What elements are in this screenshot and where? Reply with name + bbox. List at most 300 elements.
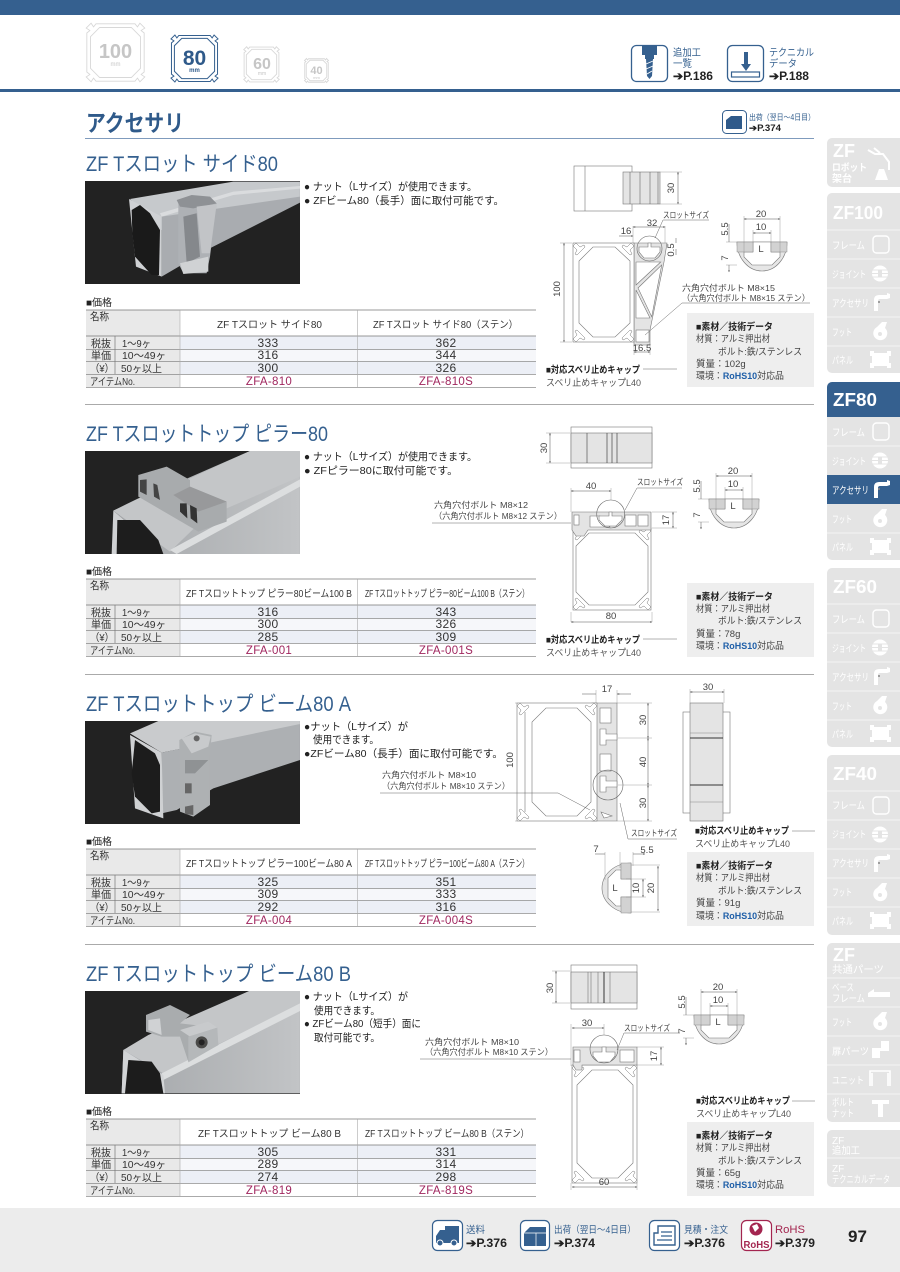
frame section: 17 (602, 684, 612, 695)
frame section: 17 (649, 1051, 660, 1061)
features: 使用できます。 (314, 1004, 380, 1017)
material data box: ボルト:鉄/ステンレス (718, 885, 802, 897)
sidebar: ZF machining and technical data (827, 1130, 900, 1187)
slot size section: L (758, 244, 764, 255)
product photo (85, 721, 300, 824)
sidebar: ZF100: ZF100 (833, 203, 883, 223)
frame section: 六角穴付ボルト M8×10 (425, 1037, 519, 1047)
material data box: 材質：アルミ押出材 (696, 1142, 770, 1154)
price table: 325 (258, 875, 278, 889)
icon: 40mm: 40 (310, 65, 323, 77)
frame section: 30 (638, 798, 649, 808)
price table: ZF Tスロットトップ ビーム80 B (198, 1128, 341, 1140)
slot size section: 10 (756, 222, 766, 233)
price table: 274 (258, 1170, 278, 1184)
frame section: 六角穴付ボルト M8×12 (434, 500, 528, 510)
price table: 326 (436, 361, 456, 375)
material data box: ボルト:鉄/ステンレス (718, 615, 802, 627)
sidebar: ZF100: ジョイント (832, 270, 866, 281)
sidebar: ZF60 (827, 568, 900, 747)
price table: ■価格 (86, 1105, 112, 1118)
frame section: スロットサイズ (637, 477, 683, 487)
price table: ZF Tスロット サイド80（ステン） (373, 319, 518, 331)
slot size section: 5.5 (677, 995, 688, 1009)
footer: RoHS: RoHS (744, 1240, 770, 1251)
price table: 1〜9ヶ (122, 877, 151, 889)
nav: additional machining: ➔P.186 (673, 71, 713, 83)
sidebar: ZF robot: ZF (833, 141, 855, 161)
features: ●ZFビーム80（長手）面に取付可能です。 (304, 747, 503, 760)
sidebar: ZF60: パネル (832, 729, 853, 741)
top view: 30 (545, 983, 556, 993)
price table: アイテムNo. (90, 1185, 135, 1197)
technical drawing (380, 682, 730, 913)
nav: additional machining: 一覧 (673, 57, 692, 70)
price table: ZFA-810 (246, 376, 292, 388)
price table: （¥） (90, 902, 114, 914)
sidebar: ZF60: フレーム (832, 614, 865, 626)
footer: shipping date (520, 1220, 636, 1250)
footer: RoHS (742, 1220, 815, 1251)
price table: ZF Tスロットトップ ピラー80ビーム100 B (186, 588, 352, 600)
footer: RoHS: RoHS (775, 1224, 805, 1236)
frame section (432, 477, 683, 622)
frame and bracket section: 16.5 (633, 343, 651, 354)
price table: 単価 (91, 1158, 111, 1171)
material data box: 材質：アルミ押出材 (696, 333, 770, 345)
sidebar: ZF100: フレーム (832, 240, 865, 252)
icon: 60mm: 60 (253, 56, 271, 73)
material data box: 材質：アルミ押出材 (696, 872, 770, 884)
price table: 289 (258, 1157, 278, 1171)
price table: （¥） (90, 363, 114, 375)
frame and bracket section: 32 (647, 218, 657, 229)
header rule (0, 89, 900, 92)
features: ●ナット（Lサイズ）が (304, 720, 408, 733)
top view: 30 (666, 183, 677, 193)
price table: 10〜49ヶ (122, 889, 166, 901)
price table: ZF Tスロット サイド80 (217, 319, 322, 331)
material data box: 質量：102g (696, 358, 746, 370)
price table: 309 (258, 887, 278, 901)
frame section: 30 (582, 1018, 592, 1029)
price table: 10〜49ヶ (122, 619, 166, 631)
price table: ZFA-819S (419, 1185, 473, 1197)
heading: ZF Tスロット サイド80 (86, 153, 278, 176)
icon: 60mm: mm (258, 71, 266, 77)
sidebar: ZF60: ZF60 (833, 577, 877, 597)
sidebar: ZF robot: ロボット (832, 162, 867, 174)
features: ● ZFピラー80に取付可能です。 (304, 464, 458, 477)
price table: 50ヶ以上 (121, 632, 162, 644)
features: ● ZFビーム80（長手）面に取付可能です。 (304, 194, 504, 207)
price table: アイテムNo. (90, 645, 135, 657)
material data box (687, 583, 814, 657)
price table: 326 (436, 617, 456, 631)
technical drawing (432, 427, 759, 622)
sidebar: ZF machining and technical data: ZF (832, 1136, 844, 1147)
footer: quotation and order: 見積・注文 (684, 1224, 728, 1236)
material data box: ■素材／技術データ (696, 860, 773, 872)
sidebar: ZF common parts: 共通パーツ (832, 964, 884, 976)
sidebar: ZF machining and technical data: ZF (832, 1164, 844, 1175)
slot size section: 20 (713, 982, 723, 993)
features: ● ナット（Lサイズ）が (304, 990, 408, 1003)
price table: 333 (258, 336, 278, 350)
slot size section (692, 466, 759, 529)
icon: 40mm (304, 58, 328, 82)
material data box: 環境：RoHS10対応品 (696, 370, 784, 382)
footer: shipping cost: 送料 (466, 1224, 485, 1236)
price table: 300 (258, 617, 278, 631)
nav: technical data: データ (769, 57, 797, 70)
slot size section (593, 844, 660, 913)
footer: quotation and order (650, 1220, 728, 1250)
price table (86, 1105, 536, 1197)
top colour band (0, 0, 900, 15)
slot size section: 5.5 (640, 845, 654, 856)
nav: additional machining: 追加工 (673, 46, 701, 59)
sidebar: ZF60: ジョイント (832, 644, 866, 655)
price table: ■価格 (86, 296, 112, 309)
slot size section: 7 (593, 844, 599, 855)
anti-slip cap: スベリ止めキャップL40 (546, 377, 641, 389)
price table: ZF Tスロットトップ ピラー80ビーム100 B（ステン） (365, 588, 529, 600)
section divider (85, 404, 814, 405)
material data box (687, 1122, 814, 1196)
sidebar: ZF60: アクセサリ (832, 672, 869, 684)
price table: アイテムNo. (90, 915, 135, 927)
anti-slip cap (695, 825, 815, 850)
sidebar: ZF60: フット (832, 702, 852, 713)
sidebar: ZF common parts: 扉パーツ (832, 1046, 869, 1058)
price table: 351 (436, 875, 456, 889)
price table: ZFA-001 (246, 645, 292, 657)
heading: ZF Tスロットトップ ビーム80 A (86, 693, 351, 716)
icon: 100mm (86, 23, 145, 82)
footer: shipping date: ➔P.374 (554, 1238, 596, 1250)
nav: additional machining (632, 46, 713, 83)
sidebar: ZF40 (827, 755, 900, 935)
page number: 97 (848, 1227, 867, 1246)
features: ● ナット（Lサイズ）が使用できます。 (304, 180, 477, 193)
anti-slip cap: ■対応スベリ止めキャップ (695, 825, 789, 837)
sidebar: ZF100: アクセサリ (832, 298, 869, 310)
section 3: ZF T-slot top beam 80 A (85, 682, 815, 927)
sidebar: ZF robot: 架台 (832, 172, 852, 185)
sidebar: ZF40: ジョイント (832, 830, 866, 841)
slot size section: L (730, 501, 736, 512)
anti-slip cap: スベリ止めキャップL40 (546, 647, 641, 659)
nav: technical data (728, 46, 814, 83)
sidebar: ZF common parts: ボルト (832, 1097, 854, 1109)
frame and bracket section (552, 210, 810, 355)
sidebar: ZF100: パネル (832, 355, 853, 367)
price table: 50ヶ以上 (121, 902, 162, 914)
section 1: ZF T-slot side 80 (85, 153, 814, 389)
frame section: スロットサイズ (624, 1023, 670, 1033)
title rule (85, 138, 814, 139)
sidebar: ZF common parts: ZF (833, 945, 855, 965)
price table: 税抜 (91, 606, 111, 619)
technical drawing (420, 965, 744, 1190)
frame section: （六角穴付ボルト M8×10 ステン） (382, 781, 510, 791)
frame section: 60 (599, 1177, 609, 1188)
price table: アイテムNo. (90, 376, 135, 388)
slot size section: 20 (728, 466, 738, 477)
price table: 292 (258, 900, 278, 914)
footer band (0, 1208, 900, 1272)
slot size section: 10 (631, 883, 642, 893)
icon: 80mm selected: 80 (183, 47, 206, 70)
price table: 税抜 (91, 1146, 111, 1159)
price table: 単価 (91, 618, 111, 631)
frame and bracket section: 16 (621, 226, 631, 237)
material data box: 環境：RoHS10対応品 (696, 640, 784, 652)
slot size section (677, 982, 744, 1045)
nav: shipping: 出荷（翌日〜4日目） (749, 112, 815, 122)
sidebar: ZF80 active (827, 382, 900, 560)
slot size section: L (715, 1017, 721, 1028)
section 2: ZF T-slot top pillar 80 (85, 423, 814, 659)
frame and bracket section: 100 (552, 281, 563, 297)
heading: ZF Tスロットトップ ピラー80 (86, 423, 328, 446)
slot size section: 10 (713, 995, 723, 1006)
price table: 300 (258, 361, 278, 375)
sidebar: ZF common parts: フレーム (832, 993, 865, 1005)
anti-slip cap (546, 634, 677, 659)
price table: ■価格 (86, 835, 112, 848)
price table: ZF Tスロットトップ ピラー100ビーム80 A（ステン） (365, 858, 529, 870)
sidebar: ZF80 active: ZF80 (833, 390, 877, 410)
product photo (85, 181, 300, 284)
sidebar: ZF40: ZF40 (833, 764, 877, 784)
frame section: 17 (661, 515, 672, 525)
icon: 40mm: mm (313, 75, 320, 80)
sidebar: ZF100: フット (832, 328, 852, 339)
price table: ZF Tスロットトップ ビーム80 B（ステン） (365, 1128, 529, 1140)
sidebar: ZF40: パネル (832, 916, 853, 928)
price table: ZFA-001S (419, 645, 473, 657)
price table: 309 (436, 630, 456, 644)
frame section: 40 (586, 481, 596, 492)
features: 使用できます。 (313, 733, 379, 746)
price table: 331 (436, 1145, 456, 1159)
sidebar: ZF80 active: フレーム (832, 427, 865, 439)
frame section (420, 1018, 680, 1190)
features: 取付可能です。 (314, 1031, 380, 1044)
price table: 314 (436, 1157, 456, 1171)
slot size section: 5.5 (720, 222, 731, 236)
price table: 305 (258, 1145, 278, 1159)
slot size section: 20 (756, 209, 766, 220)
sidebar: ZF80 active: パネル (832, 542, 853, 554)
nav: shipping (722, 110, 815, 134)
frame and bracket section: スロットサイズ (663, 210, 709, 220)
top view (574, 166, 682, 211)
price table: 362 (436, 336, 456, 350)
price table: 333 (436, 887, 456, 901)
price table: 税抜 (91, 337, 111, 350)
slot size section: 10 (728, 479, 738, 490)
sidebar: ZF80 active: アクセサリ (832, 485, 869, 497)
slot size section: L (612, 883, 618, 894)
price table: ZFA-819 (246, 1185, 292, 1197)
product photo (85, 451, 300, 554)
sidebar: ZF common parts (827, 943, 900, 1122)
material data box: 環境：RoHS10対応品 (696, 1179, 784, 1191)
price table (86, 835, 536, 927)
features (304, 720, 503, 760)
price table: 1〜9ヶ (122, 607, 151, 619)
size selector icons (86, 23, 328, 82)
icon: 100mm: mm (110, 62, 120, 68)
footer: quotation and order: ➔P.376 (684, 1238, 725, 1250)
footer: shipping cost: ➔P.376 (466, 1238, 507, 1250)
price table: 1〜9ヶ (122, 1147, 151, 1159)
price table: 316 (258, 605, 278, 619)
material data box: ■素材／技術データ (696, 1130, 773, 1142)
price table: ZF Tスロットトップ ピラー100ビーム80 A (186, 858, 352, 870)
footer: shipping date: 出荷（翌日〜4日目） (554, 1224, 636, 1236)
frame section: 六角穴付ボルト M8×10 (382, 770, 476, 780)
top view: 30 (539, 443, 550, 453)
top view (539, 427, 652, 468)
icon: 80mm selected (171, 35, 218, 82)
price table: 344 (436, 348, 456, 362)
sidebar: ZF common parts: ユニット (832, 1076, 864, 1087)
sidebar: ZF40: アクセサリ (832, 858, 869, 870)
features (304, 450, 477, 477)
icon: 80mm selected: mm (189, 68, 200, 74)
anti-slip cap (546, 364, 677, 389)
side view: 30 (703, 682, 713, 693)
price table (86, 296, 536, 388)
slot size section: 7 (692, 512, 703, 518)
frame section: （六角穴付ボルト M8×12 ステン） (434, 511, 562, 521)
frame section: 40 (638, 757, 649, 767)
frame section: （六角穴付ボルト M8×10 ステン） (425, 1047, 553, 1057)
price table: 316 (258, 348, 278, 362)
material data box: ボルト:鉄/ステンレス (718, 346, 802, 358)
price table: 名称 (90, 849, 109, 862)
price table: 名称 (90, 1119, 109, 1132)
side view (683, 682, 730, 821)
slot size section: 7 (677, 1028, 688, 1034)
icon: 60mm (244, 47, 279, 82)
price table: ZFA-004S (419, 915, 473, 927)
footer: shipping cost (432, 1220, 507, 1250)
sidebar: ZF common parts: フット (832, 1018, 852, 1029)
material data box: ボルト:鉄/ステンレス (718, 1155, 802, 1167)
slot size section (720, 209, 787, 272)
sidebar: ZF robot (827, 138, 900, 187)
frame and bracket section: （六角穴付ボルト M8×15 ステン） (682, 293, 810, 303)
price table: 285 (258, 630, 278, 644)
sidebar: ZF machining and technical data: 追加工 (832, 1144, 860, 1157)
frame section: 30 (638, 715, 649, 725)
slot size section: 7 (720, 255, 731, 261)
price table: ZFA-004 (246, 915, 292, 927)
price table: （¥） (90, 1172, 114, 1184)
frame section: 100 (505, 752, 516, 768)
price table: 50ヶ以上 (121, 363, 162, 375)
price table: 単価 (91, 888, 111, 901)
features (304, 990, 421, 1044)
price table: 名称 (90, 579, 109, 592)
technical drawing (552, 166, 810, 355)
price table: 10〜49ヶ (122, 1159, 166, 1171)
price table: 10〜49ヶ (122, 350, 166, 362)
frame and bracket section: 0.5 (666, 243, 677, 257)
sidebar: ZF40: フット (832, 888, 852, 899)
frame section (380, 684, 677, 839)
features: ● ナット（Lサイズ）が使用できます。 (304, 450, 477, 463)
sidebar: ZF80 active: ジョイント (832, 457, 866, 468)
price table (86, 565, 536, 657)
material data box: 環境：RoHS10対応品 (696, 910, 784, 922)
anti-slip cap: ■対応スベリ止めキャップ (546, 634, 640, 646)
material data box: ■素材／技術データ (696, 591, 773, 603)
sidebar: ZF80 active: フット (832, 515, 852, 526)
icon: 100mm: 100 (99, 41, 132, 63)
price table: 名称 (90, 310, 109, 323)
heading: ZF Tスロットトップ ビーム80 B (86, 963, 351, 986)
material data box: 質量：65g (696, 1167, 740, 1179)
frame and bracket section: 六角穴付ボルト M8×15 (682, 283, 775, 293)
sidebar: ZF common parts: ベース (832, 982, 854, 994)
price table: 1〜9ヶ (122, 338, 151, 350)
frame section: 80 (606, 611, 616, 622)
sidebar: ZF40: フレーム (832, 800, 865, 812)
frame section: スロットサイズ (631, 828, 677, 838)
price table: 343 (436, 605, 456, 619)
section divider (85, 944, 814, 945)
sidebar: ZF100 (827, 193, 900, 373)
price table: （¥） (90, 632, 114, 644)
price table: 単価 (91, 349, 111, 362)
material data box: 質量：78g (696, 628, 740, 640)
anti-slip cap: ■対応スベリ止めキャップ (546, 364, 640, 376)
material data box: ■素材／技術データ (696, 321, 773, 333)
anti-slip cap (696, 1095, 815, 1120)
page title: アクセサリ (86, 110, 184, 136)
features (304, 180, 504, 207)
section 4: ZF T-slot top beam 80 B (85, 963, 815, 1197)
anti-slip cap: スベリ止めキャップL40 (695, 838, 790, 850)
top view (545, 965, 637, 1009)
slot size section: 20 (646, 883, 657, 893)
price table: 316 (436, 900, 456, 914)
slot size section: 5.5 (692, 479, 703, 493)
material data box: 質量：91g (696, 897, 740, 909)
anti-slip cap: ■対応スベリ止めキャップ (696, 1095, 790, 1107)
price table: 298 (436, 1170, 456, 1184)
features: ● ZFビーム80（短手）面に (304, 1017, 421, 1030)
price table: 税抜 (91, 876, 111, 889)
nav: technical data: テクニカル (769, 47, 814, 59)
sidebar: ZF common parts: ナット (832, 1108, 854, 1120)
price table: 50ヶ以上 (121, 1172, 162, 1184)
price table: ZFA-810S (419, 376, 473, 388)
material data box (687, 313, 814, 387)
section divider (85, 674, 814, 675)
anti-slip cap: スベリ止めキャップL40 (696, 1108, 791, 1120)
footer: RoHS: ➔P.379 (775, 1238, 815, 1250)
material data box: 材質：アルミ押出材 (696, 603, 770, 615)
material data box (687, 852, 814, 926)
price table: ■価格 (86, 565, 112, 578)
